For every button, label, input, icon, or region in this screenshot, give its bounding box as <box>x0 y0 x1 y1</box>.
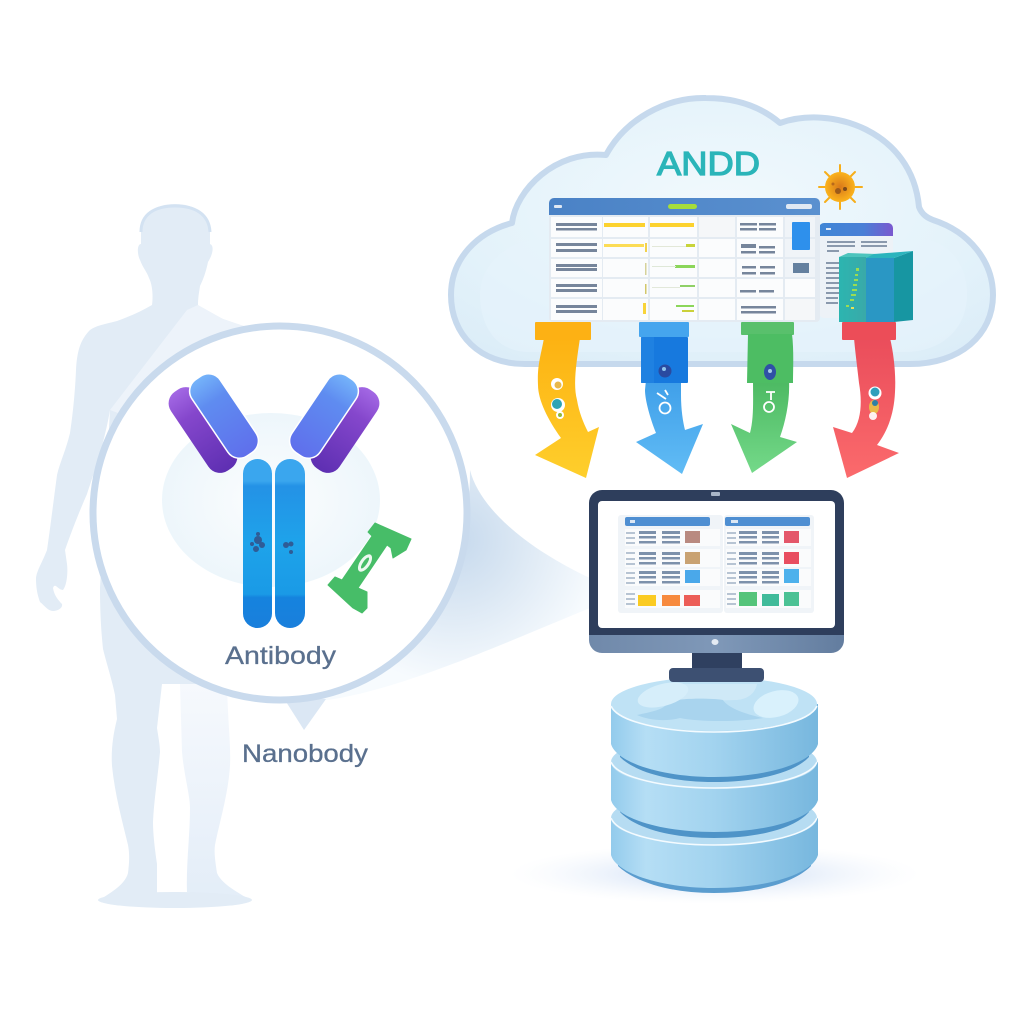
database shadow <box>510 844 920 904</box>
bottom disk <box>611 791 818 893</box>
magnifier circle <box>93 326 467 730</box>
arrow: blue <box>636 322 703 474</box>
data cube <box>839 251 913 322</box>
label: Antibody: Antibody <box>225 642 337 670</box>
table cells <box>551 217 815 320</box>
small icon block <box>793 263 809 273</box>
antibody <box>163 368 385 628</box>
human body silhouette <box>36 204 300 908</box>
label: Nanobody: Nanobody <box>242 740 369 768</box>
icon: virus <box>819 165 862 209</box>
bezel <box>589 490 844 635</box>
nanobody <box>328 523 411 613</box>
right arm <box>284 368 385 478</box>
secondary window <box>819 223 893 318</box>
stem markers <box>250 532 294 554</box>
database cylinder <box>611 677 818 893</box>
arrow: red <box>833 322 899 478</box>
title: ANDD: ANDD <box>657 145 760 182</box>
foot <box>669 668 764 682</box>
stand <box>692 650 742 672</box>
yellow and green value bars <box>604 223 695 314</box>
monitor <box>589 490 844 682</box>
stem right <box>275 459 305 628</box>
left arm <box>163 368 264 478</box>
dashboard panels <box>618 515 814 613</box>
main data table <box>549 198 820 322</box>
magnifier beam to monitor <box>300 470 590 700</box>
arrow: green <box>731 322 797 473</box>
row text bars <box>556 223 776 314</box>
chin <box>589 633 844 653</box>
middle disk <box>611 735 818 838</box>
arrow: yellow <box>535 322 599 478</box>
top disk <box>611 677 818 782</box>
cloud <box>451 98 993 364</box>
stem left <box>243 459 272 628</box>
blue status block <box>792 222 810 250</box>
